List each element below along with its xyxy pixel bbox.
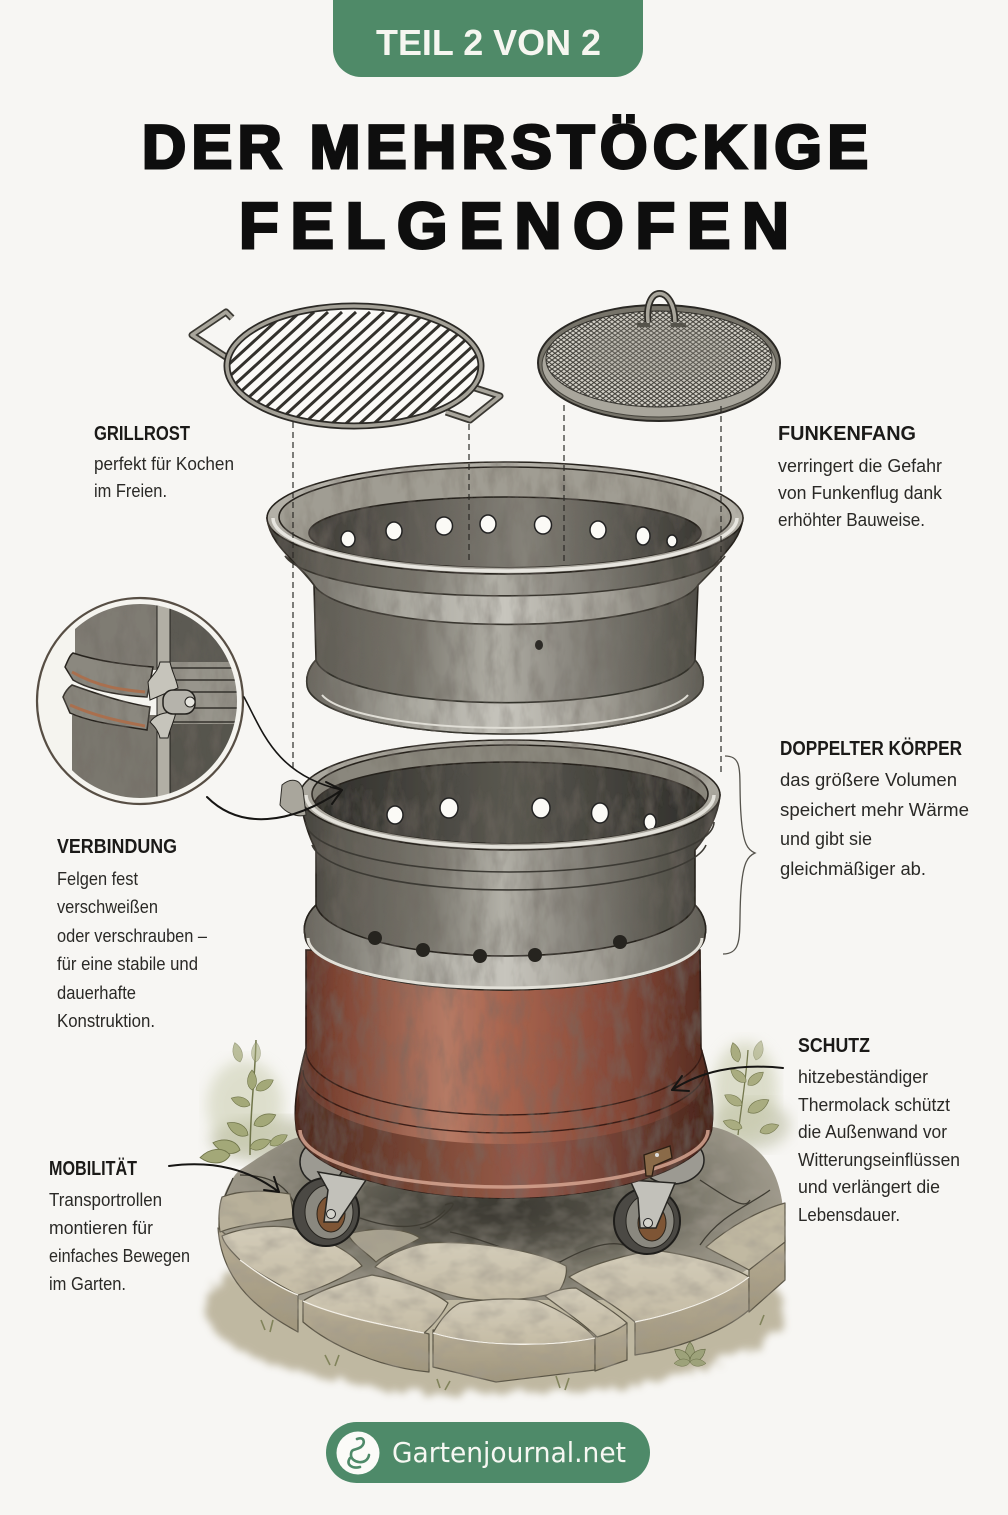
callout: Funkenfang: verringert die Gefahr: [778, 456, 942, 476]
footer badge: Gartenjournal.net: [326, 1422, 650, 1483]
callout: Mobilität: montieren für: [49, 1218, 153, 1238]
stone: center front: [433, 1330, 595, 1382]
grill bars: [230, 310, 478, 422]
paving joints: [220, 1175, 770, 1262]
callout: Verbindung: Felgen fest: [57, 869, 138, 889]
callout: Verbindung: dauerhafte: [57, 983, 136, 1003]
callout: Verbindung: Konstruktion.: [57, 1011, 155, 1031]
callout: Verbindung: oder verschrauben –: [57, 926, 207, 946]
small front plant: [672, 1342, 708, 1367]
callout: Doppelter Körper: gleichmäßiger ab.: [780, 859, 926, 879]
callout: Grillrost: [94, 423, 234, 501]
callout: Verbindung: VERBINDUNG: [57, 836, 177, 858]
stone: far left: [218, 1228, 298, 1332]
callout: Verbindung: verschweißen: [57, 897, 158, 917]
title: DER MEHRSTÖCKIGE: [142, 113, 868, 181]
dashed assembly guides: [293, 405, 721, 772]
callout: Verbindung: [57, 836, 207, 1031]
footer badge: Gartenjournal.net: Gartenjournal.net: [392, 1436, 626, 1469]
stones: [218, 1191, 785, 1382]
spark guard: [538, 294, 780, 421]
callout: Funkenfang: [778, 423, 943, 530]
callout: Verbindung: für eine stabile und: [57, 954, 198, 974]
callout: Funkenfang: FUNKENFANG: [778, 423, 916, 445]
caster: right: [614, 1136, 704, 1254]
lower rim bands: [306, 822, 714, 890]
paving top: [218, 1119, 785, 1300]
callout: Doppelter Körper: und gibt sie: [780, 829, 872, 849]
arrow: inset bottom to rim: [207, 790, 342, 819]
arrow: inset top to rim: [244, 697, 342, 790]
callout: Schutz: Thermolack schützt: [798, 1095, 950, 1115]
stone: far right: [749, 1240, 785, 1312]
upper rim lip: [273, 518, 737, 571]
stone: left front: [303, 1301, 429, 1372]
callout: Schutz: SCHUTZ: [798, 1035, 870, 1057]
callout: Schutz: Lebensdauer.: [798, 1205, 900, 1225]
callout: Mobilität: MOBILITÄT: [49, 1157, 137, 1180]
lower collar holes: [368, 931, 627, 963]
lower rim: steel body and top ring: [280, 740, 720, 990]
detail inset: connection: [37, 598, 250, 815]
caster: left: [293, 1140, 366, 1246]
callout: Mobilität: Transportrollen: [49, 1190, 162, 1210]
grill handles: [192, 312, 500, 420]
callout: Mobilität: [49, 1157, 190, 1294]
arrows: [169, 697, 783, 1192]
callout: Funkenfang: erhöhter Bauweise.: [778, 510, 925, 530]
strap on rust rim: [644, 1146, 672, 1176]
plant right: [713, 1040, 780, 1138]
callout: Schutz: [798, 1035, 960, 1225]
ground patch: [205, 1226, 785, 1394]
inset bolt: [163, 690, 195, 714]
rust rim highlight: [300, 1130, 708, 1187]
upper rim vent holes: [341, 515, 677, 547]
callout: Grillrost: GRILLROST: [94, 423, 190, 445]
callout: Schutz: hitzebeständiger: [798, 1067, 928, 1087]
upper rim: [267, 462, 743, 734]
badge: Teil 2 von 2: [333, 0, 643, 77]
arrow: protection: [672, 1067, 783, 1090]
callout: Grillrost: im Freien.: [94, 481, 167, 501]
callout: Mobilität: einfaches Bewegen: [49, 1246, 190, 1266]
callout: Schutz: und verlängert die: [798, 1177, 940, 1197]
rim notch: [280, 780, 306, 816]
title: [142, 113, 868, 262]
title: FELGENOFEN: [239, 189, 789, 262]
collar highlight: [308, 938, 702, 988]
spark guard handle: [648, 294, 675, 322]
lower rim vent holes: [387, 798, 656, 830]
grass tufts: [261, 1315, 764, 1390]
badge: Teil 2 von 2: TEIL 2 VON 2: [376, 22, 601, 63]
callout: Doppelter Körper: DOPPELTER KÖRPER: [780, 737, 962, 760]
stone: small front: [595, 1323, 627, 1371]
callout: Mobilität: im Garten.: [49, 1274, 126, 1294]
icon: logo: [336, 1432, 380, 1474]
callout: Doppelter Körper: speichert mehr Wärme: [780, 800, 969, 820]
illustration: ground and stone base: [200, 1040, 790, 1394]
casters: [293, 1136, 704, 1254]
stone: mid back: [375, 1243, 566, 1300]
stone: right front: [635, 1277, 749, 1355]
callout: Schutz: die Außenwand vor: [798, 1122, 947, 1142]
callout: Doppelter Körper: [780, 737, 969, 879]
arrow: mobility: [169, 1164, 279, 1192]
grill grate: [188, 302, 504, 430]
lower rim lip: [306, 795, 714, 847]
stone highlights: [240, 1260, 749, 1344]
callout: Funkenfang: von Funkenflug dank: [778, 483, 943, 503]
callout: Schutz: Witterungseinflüssen: [798, 1150, 960, 1170]
callout: Doppelter Körper: das größere Volumen: [780, 770, 957, 790]
brace for double body: [723, 756, 755, 954]
callout: Grillrost: perfekt für Kochen: [94, 454, 234, 474]
lower rim: rust painted: [295, 950, 713, 1198]
plant left: [200, 1040, 290, 1164]
